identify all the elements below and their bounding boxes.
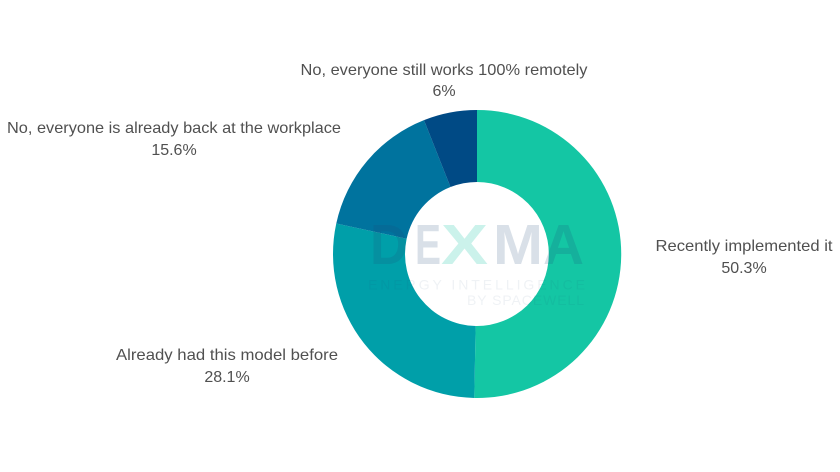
watermark logo	[368, 213, 585, 308]
label: already back at workplace	[7, 120, 341, 159]
logo tagline: ENERGY INTELLIGENCE	[368, 276, 585, 292]
logo wordmark: A	[543, 213, 584, 277]
logo wordmark: M	[493, 213, 543, 277]
segment: already back at workplace 15.6%	[336, 120, 450, 239]
label: still 100% remote: 6%	[432, 83, 456, 100]
logo wordmark: D	[370, 213, 408, 277]
label: recently implemented: Recently implemented it	[656, 238, 833, 255]
label: already had this model	[116, 347, 338, 386]
label: already had this model: 28.1%	[204, 369, 250, 386]
label: already back at workplace: No, everyone is already back at the workplace	[7, 120, 341, 137]
logo byline: BY SPACEWELL	[467, 292, 584, 308]
logo wordmark: X	[441, 213, 488, 277]
label: already had this model: Already had this model before	[116, 347, 338, 364]
label: still 100% remote: No, everyone still works 100% remotely	[300, 62, 588, 79]
label: recently implemented: 50.3%	[721, 260, 767, 277]
label: already back at workplace: 15.6%	[151, 142, 197, 159]
segment: recently implemented 50.3%	[474, 110, 621, 398]
label: recently implemented	[656, 238, 833, 277]
logo wordmark	[370, 213, 584, 277]
segment: already had this model 28.1%	[333, 223, 476, 398]
segment: still 100% remote 6%	[424, 110, 477, 187]
label: still 100% remote	[300, 62, 588, 100]
donut chart	[333, 110, 621, 398]
logo wordmark: E	[415, 213, 441, 277]
